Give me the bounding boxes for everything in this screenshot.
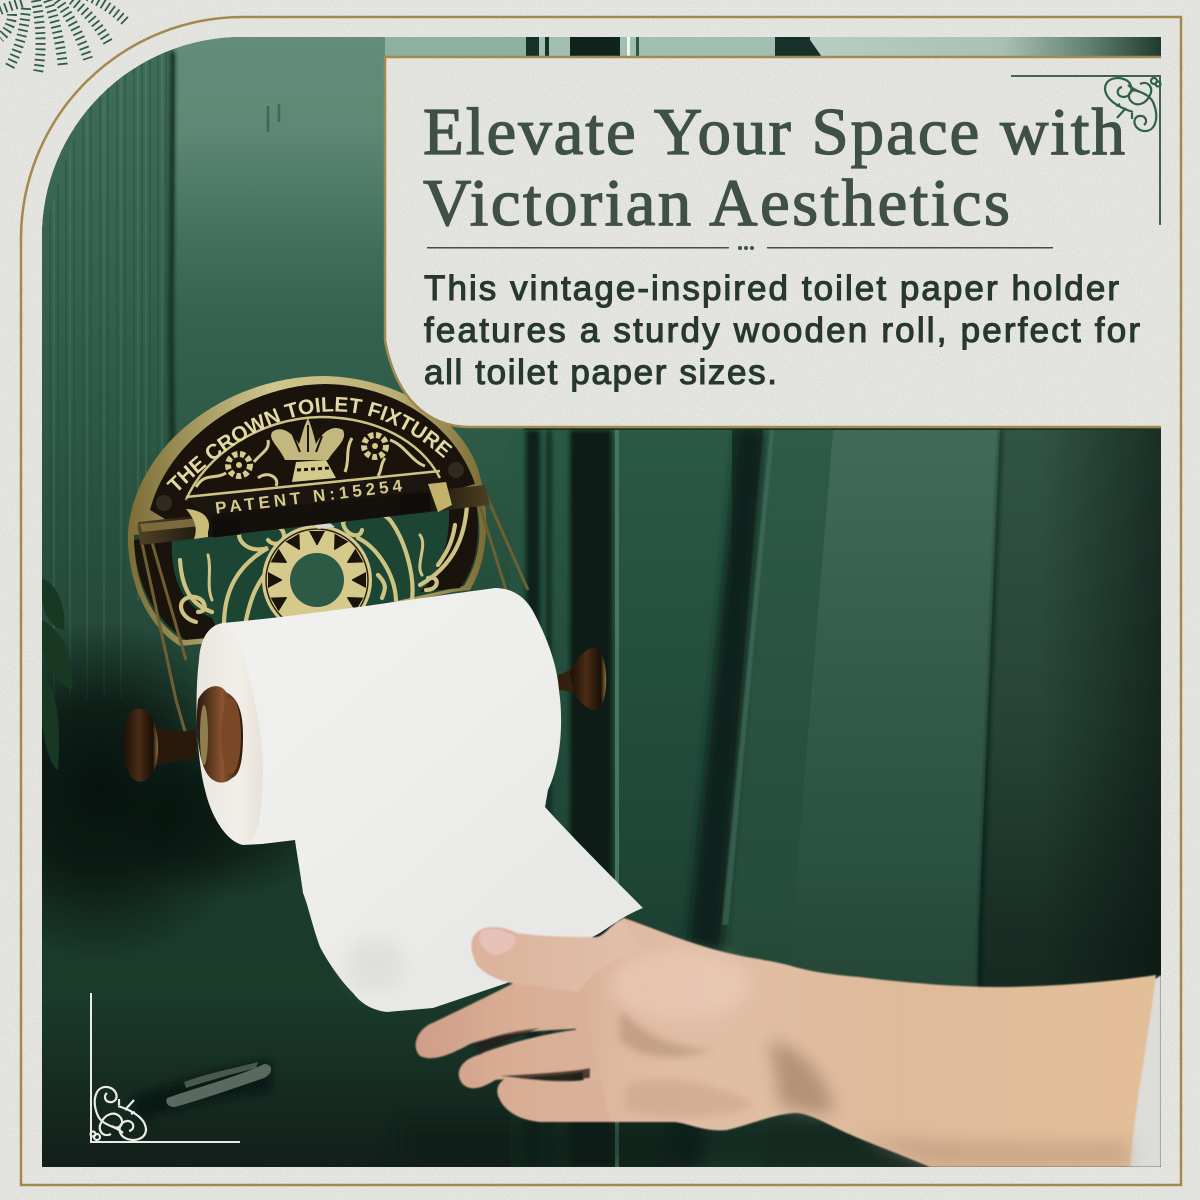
plant at left edge [42, 578, 72, 770]
soft tilted dark fold [664, 430, 764, 1167]
flower ornament left [196, 440, 277, 487]
roll body and hanging sheet [205, 588, 643, 1012]
body text: features a sturdy wooden roll, perfect for [424, 311, 1140, 350]
groove column [524, 430, 622, 1167]
heading: Elevate Your Space with [423, 95, 1125, 169]
body text: all toilet paper sizes. [424, 353, 777, 392]
corner ornament top right [1011, 76, 1160, 225]
finger gap shadows [500, 1068, 590, 1080]
roll end face [197, 623, 263, 845]
flower ornament right [345, 435, 425, 476]
fern leaf decoration [0, 0, 126, 73]
crown ornament [271, 418, 344, 482]
corner ornament bottom left [90, 993, 240, 1142]
roller rod [138, 485, 490, 545]
body text [424, 269, 1140, 392]
forearm and palm [570, 918, 1156, 1167]
inner openwork plate [134, 492, 479, 640]
forearm lower shade [860, 1135, 1130, 1167]
body text: This vintage-inspired toilet paper holder [424, 269, 1119, 308]
arch inner line [186, 417, 440, 500]
lower finger [497, 1077, 610, 1122]
door latch detail [130, 1060, 272, 1120]
thumb [471, 918, 640, 992]
panel background [385, 57, 1178, 427]
diamond at top of ring [315, 523, 335, 529]
vertical grooves [171, 52, 1002, 1167]
patent inscription: PATENT N:15254 [214, 476, 404, 518]
patent band [186, 473, 438, 500]
scroll ornament ironwork [180, 505, 467, 625]
support arms [138, 488, 528, 735]
back of hand highlight [610, 951, 750, 1019]
center sun ring [262, 525, 372, 618]
middle finger [459, 1028, 596, 1088]
heading: Victorian Aesthetics [423, 166, 1010, 240]
dark shadow below holder [42, 632, 210, 938]
dark arch band [150, 384, 475, 528]
palm shadow [620, 1010, 715, 1057]
sheet grey patch [352, 944, 398, 986]
rod highlights [140, 518, 196, 532]
hand and forearm [416, 918, 1161, 1167]
heading [423, 95, 1125, 240]
thumb nail [480, 929, 516, 955]
right knob [556, 647, 606, 710]
arched inscription [176, 411, 456, 494]
top strip highlights [385, 37, 526, 57]
holder: brass back plate [128, 376, 530, 732]
left knob [123, 686, 243, 783]
sleeve cuff [1128, 975, 1161, 1167]
divider [427, 246, 1053, 250]
brass clips [186, 509, 209, 539]
screws [156, 495, 172, 511]
dark lower left leaf band [134, 536, 220, 640]
holder: brass back plate: THE CROWN TOILET FIXTURE [166, 396, 452, 490]
caption panel [385, 57, 1178, 427]
lower door darkness [510, 1118, 916, 1167]
small scratches on door [268, 104, 279, 132]
left wood grain [50, 52, 167, 356]
brass disc [128, 376, 486, 646]
toilet paper roll and sheet [197, 588, 643, 1012]
index finger [416, 980, 590, 1058]
